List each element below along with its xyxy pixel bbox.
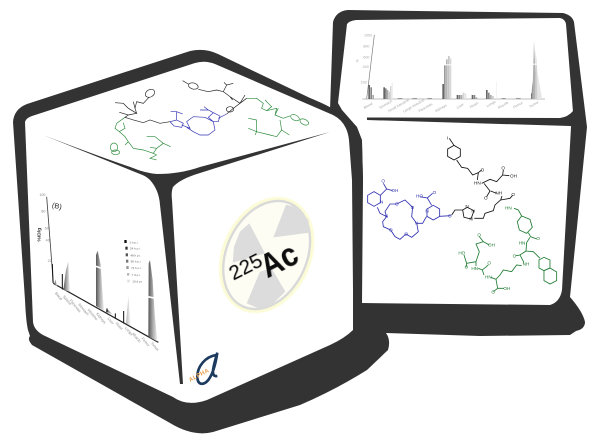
axis tick labels: Pancreas xyxy=(69,299,82,313)
axis tick labels: 20 xyxy=(48,259,52,263)
legend: 1 h p.i. xyxy=(129,240,138,244)
axis title: %ID/g xyxy=(37,228,43,242)
axis tick labels: 100 xyxy=(39,193,45,197)
green fragment: NH xyxy=(523,262,529,267)
chart: back die biodistribution bars: Muscle xyxy=(497,101,509,110)
axis tick labels: Femur xyxy=(141,337,151,348)
blue fragment: O xyxy=(389,228,393,233)
black fragment: O xyxy=(511,192,515,197)
green fragment: O xyxy=(536,236,540,241)
axis tick labels: Intestine xyxy=(87,308,99,321)
black fragment: O xyxy=(481,168,485,173)
blue fragment: O xyxy=(381,179,385,184)
legend: 7 d p.i. xyxy=(132,273,141,277)
chart: back die biodistribution bars: 1000 xyxy=(364,33,372,37)
blue fragment: N xyxy=(425,209,429,214)
black fragment: O xyxy=(484,195,488,200)
legend: 96 h p.i. xyxy=(131,260,141,264)
isotope label: 225 xyxy=(225,249,266,285)
blue fragment: O xyxy=(433,190,437,195)
blue fragment: N xyxy=(385,214,388,219)
faces xyxy=(25,62,353,403)
radiation symbol with 225Ac xyxy=(201,181,332,329)
blue fragment: O xyxy=(448,213,452,218)
face edges xyxy=(43,132,330,384)
panel label: (B) xyxy=(51,200,63,211)
chart: back die biodistribution bars: 600 xyxy=(363,56,369,60)
chart: back die biodistribution bars: Kidneys xyxy=(434,103,448,113)
green fragment: HN xyxy=(471,266,478,271)
black fragment: N xyxy=(465,204,469,209)
axis tick labels: Lungs xyxy=(124,326,133,336)
green fragment: HO xyxy=(458,250,466,255)
black fragment: NH xyxy=(495,191,502,196)
chart: back die biodistribution bars: Small intestine xyxy=(387,98,410,114)
isotope label xyxy=(225,234,304,300)
chart: back die biodistribution bars: 800 xyxy=(363,45,369,49)
back die xyxy=(330,10,587,345)
axis tick labels: Blood xyxy=(54,291,63,301)
chart: back die biodistribution bars: Blood xyxy=(363,102,373,110)
black fragment: N xyxy=(471,209,475,214)
green fragment: O xyxy=(491,289,495,294)
blue fragment: OH xyxy=(391,188,398,193)
chart: back die biodistribution bars: Liver xyxy=(456,102,465,110)
axis tick labels xyxy=(39,193,160,353)
chart: back die biodistribution bars: 200 xyxy=(361,81,367,85)
green fragment: O xyxy=(513,253,517,258)
axis tick labels: Spleen xyxy=(62,295,72,306)
blue fragment: O xyxy=(411,205,415,210)
green fragment: O xyxy=(465,264,469,269)
chart: back die biodistribution bars: % xyxy=(355,59,359,62)
front die xyxy=(13,50,389,433)
molecule: top face xyxy=(110,81,310,160)
chart: back die biodistribution bars xyxy=(355,33,545,114)
legend: 72 h p.i. xyxy=(131,266,142,270)
black fragment: HN xyxy=(474,181,481,186)
black fragment: OH xyxy=(510,173,517,178)
chart: back die biodistribution bars: 400 xyxy=(363,65,369,69)
green fragment: OH xyxy=(488,243,495,248)
axis tick labels: Muscle xyxy=(131,332,142,344)
chart: back die biodistribution bars: Pancreas xyxy=(418,102,433,113)
axis tick labels: 60 xyxy=(45,226,49,230)
axis tick labels: Kidneys xyxy=(95,312,107,325)
logo: alpha xyxy=(188,353,217,384)
blue fragment xyxy=(368,179,452,239)
logo: alpha: ALPHA xyxy=(188,368,211,384)
blue fragment: HO xyxy=(416,194,423,199)
black fragment xyxy=(447,135,517,222)
molecule: back die conjugate xyxy=(368,135,557,294)
legend: 24 h p.i. xyxy=(130,247,141,251)
chart: back die biodistribution bars: Stomach xyxy=(378,99,393,110)
blue fragment: N xyxy=(415,221,418,226)
axis tick labels: Liver xyxy=(107,317,115,326)
axis tick labels: 40 xyxy=(46,238,50,242)
chart: back die biodistribution bars: Tumor xyxy=(528,100,540,109)
axis tick labels: Heart xyxy=(115,321,123,331)
legend: 48 h p.i. xyxy=(130,253,141,257)
chart: left face biodistribution 3D bars xyxy=(37,193,160,353)
chart: back die biodistribution bars: Lungs xyxy=(486,100,497,108)
legend xyxy=(124,240,143,284)
green fragment xyxy=(458,205,557,294)
green fragment: HN xyxy=(485,275,492,280)
blue fragment: N xyxy=(380,199,383,204)
green fragment: O xyxy=(487,261,491,266)
blue fragment: O xyxy=(404,232,408,237)
isotope label: Ac xyxy=(254,236,304,286)
chart: back die biodistribution bars: Femur xyxy=(512,100,524,110)
green fragment: OH xyxy=(503,286,510,291)
green fragment: O xyxy=(477,233,481,238)
axis tick labels: Tumor xyxy=(150,341,160,353)
black fragment: N xyxy=(469,217,473,222)
black fragment: I xyxy=(447,135,448,140)
chart: back die biodistribution bars: Large intestine xyxy=(402,98,425,114)
axis tick labels: Stomach xyxy=(77,303,90,316)
green fragment: HN xyxy=(519,241,525,246)
blue fragment: O xyxy=(395,202,399,207)
legend: 10 d p.i. xyxy=(132,280,143,284)
axis tick labels: 80 xyxy=(41,210,45,214)
black fragment: O xyxy=(501,165,505,170)
chart: back die biodistribution bars: Heart xyxy=(469,101,479,109)
green fragment: HN xyxy=(505,205,512,210)
